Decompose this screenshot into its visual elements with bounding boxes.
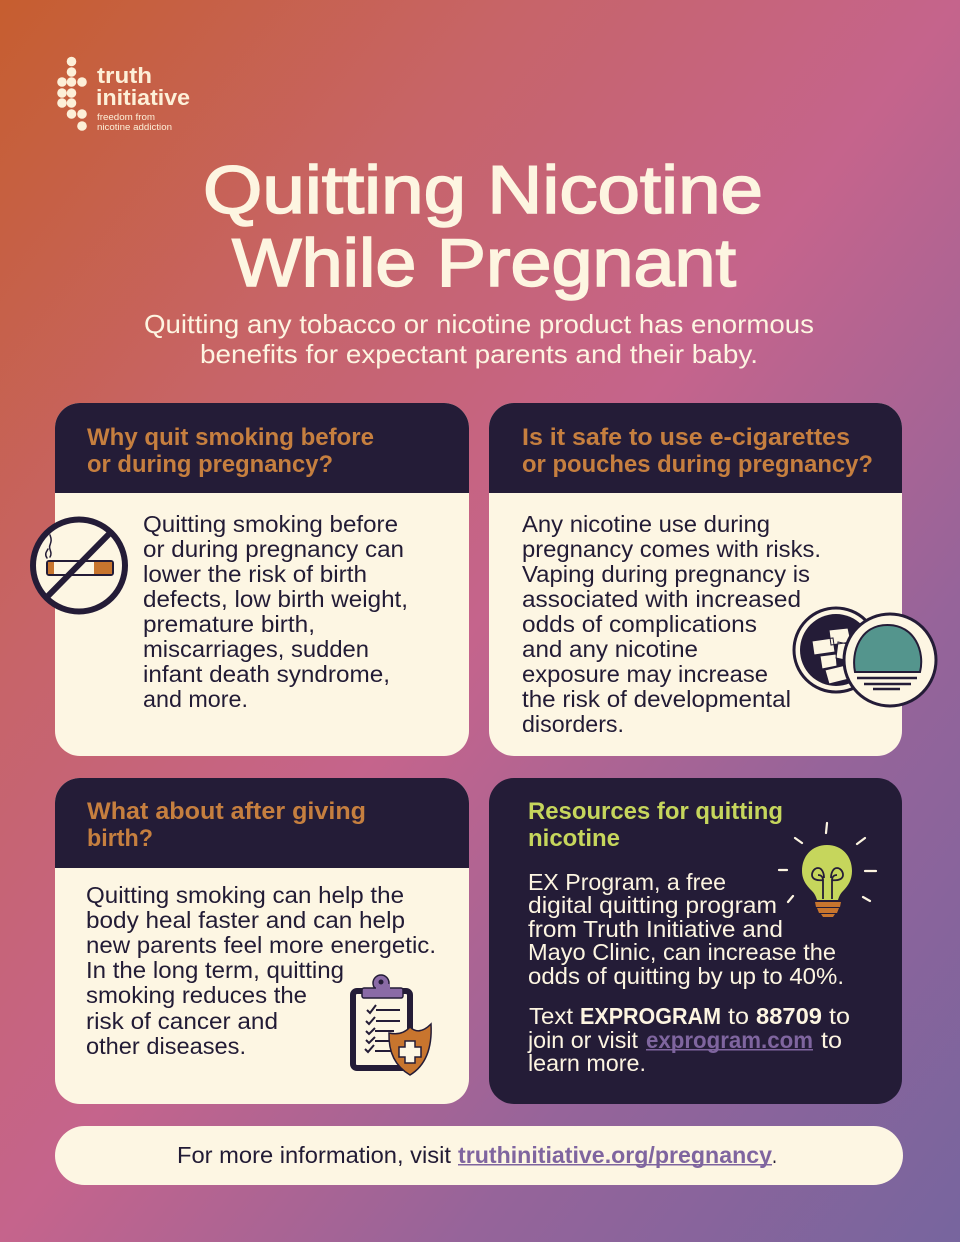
text: call to action: exprogram.com (646, 1027, 813, 1053)
text: why quit body: miscarriages, sudden (143, 636, 369, 662)
text: EX Program description: Mayo Clinic, can increase the (528, 939, 836, 965)
title: Quitting Nicotine (203, 152, 763, 228)
text: e-cigarettes body (522, 511, 821, 737)
logo: truth initiative: freedom from (97, 112, 155, 122)
heading: after birth: birth? (87, 825, 153, 852)
text: after birth body: Quitting smoking can help the (86, 882, 404, 908)
text: call to action: 88709 (756, 1003, 822, 1029)
text: call to action: Text (529, 1003, 573, 1029)
logo: truth initiative: truth (97, 63, 152, 88)
heading: resources: nicotine (528, 825, 620, 852)
icon: light bulb (779, 823, 876, 917)
text: e-cigarettes body: exposure may increase (522, 661, 768, 687)
icon: clipboard and shield (353, 975, 431, 1075)
heading: resources (528, 798, 783, 852)
text: why quit body: infant death syndrome, (143, 661, 390, 687)
text: EX Program description: from Truth Initiative and (528, 916, 783, 942)
heading: e-cigarettes: Is it safe to use e-cigarettes (522, 424, 850, 451)
heading: why quit: or during pregnancy? (87, 451, 333, 478)
heading: after birth (87, 798, 366, 852)
text: after birth body: smoking reduces the (86, 982, 307, 1008)
logo: truth initiative: nicotine addiction (97, 122, 172, 132)
text: why quit body: or during pregnancy can (143, 536, 404, 562)
icon: nicotine pouches (794, 608, 936, 706)
text: why quit body: premature birth, (143, 611, 315, 637)
text: call to action: to (821, 1027, 842, 1053)
text: EX Program description: EX Program, a free (528, 869, 726, 895)
panel: after giving birth (55, 778, 469, 1104)
text: e-cigarettes body: associated with increased (522, 586, 801, 612)
icon: no smoking (33, 520, 125, 612)
text: e-cigarettes body: Vaping during pregnancy is (522, 561, 810, 587)
text: after birth body: risk of cancer and (86, 1008, 278, 1034)
text: EX Program description: odds of quitting by up to 40%. (528, 963, 844, 989)
text: EX Program description: digital quitting program (528, 892, 777, 918)
panel: e-cigarettes or pouches (489, 403, 936, 756)
text: why quit body: and more. (143, 686, 248, 712)
text: after birth body: other diseases. (86, 1033, 246, 1059)
text: e-cigarettes body: odds of complications (522, 611, 757, 637)
footer: more information: . (772, 1142, 777, 1168)
text: e-cigarettes body: Any nicotine use during (522, 511, 770, 537)
text: why quit body (143, 511, 408, 712)
text: e-cigarettes body: disorders. (522, 711, 624, 737)
text: call to action: to (829, 1003, 850, 1029)
subtitle (144, 309, 814, 369)
panel: why quit smoking (33, 403, 469, 756)
heading: resources: Resources for quitting (528, 798, 783, 825)
text: after birth body: body heal faster and can help (86, 907, 405, 933)
text: call to action: join or visit (527, 1027, 638, 1053)
text: after birth body: In the long term, quitting (86, 957, 344, 983)
text: e-cigarettes body: pregnancy comes with risks. (522, 536, 821, 562)
text: why quit body: lower the risk of birth (143, 561, 367, 587)
panel: resources for quitting (489, 778, 902, 1104)
text: e-cigarettes body: the risk of developmental (522, 686, 791, 712)
heading: why quit: Why quit smoking before (87, 424, 374, 451)
subtitle: Quitting any tobacco or nicotine product has enormous (144, 309, 814, 339)
heading: e-cigarettes: or pouches during pregnancy? (522, 451, 873, 478)
subtitle: benefits for expectant parents and their baby. (200, 339, 758, 369)
text: EX Program description (528, 869, 844, 989)
text: why quit body: defects, low birth weight, (143, 586, 408, 612)
text: call to action (527, 1003, 850, 1076)
logo: truth initiative: initiative (96, 85, 190, 110)
logo: truth initiative (57, 57, 190, 132)
title (203, 152, 763, 301)
text: call to action: to (728, 1003, 749, 1029)
footer: more information: For more information, visit (177, 1142, 451, 1168)
text: after birth body (86, 882, 436, 1059)
footer: more information: truthinitiative.org/pregnancy (458, 1142, 772, 1168)
text: call to action: EXPROGRAM (580, 1003, 721, 1029)
footer: more information (55, 1126, 903, 1185)
heading: e-cigarettes (522, 424, 873, 478)
text: call to action: learn more. (528, 1050, 646, 1076)
heading: why quit (87, 424, 374, 478)
title: While Pregnant (232, 225, 736, 301)
text: e-cigarettes body: and any nicotine (522, 636, 698, 662)
heading: after birth: What about after giving (87, 798, 366, 825)
text: after birth body: new parents feel more energetic. (86, 932, 436, 958)
text: why quit body: Quitting smoking before (143, 511, 398, 537)
